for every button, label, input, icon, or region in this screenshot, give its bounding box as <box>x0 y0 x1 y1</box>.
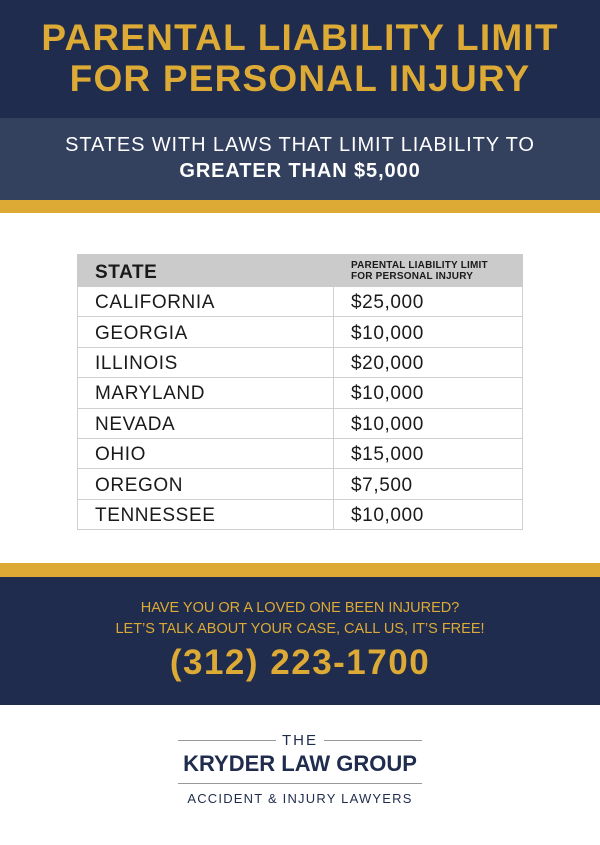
subheader: STATES WITH LAWS THAT LIMIT LIABILITY TO <box>65 134 535 156</box>
table: $20,000 <box>351 353 424 374</box>
call to action: LET’S TALK ABOUT YOUR CASE, CALL US, IT’S FREE! <box>115 621 485 637</box>
subheader: GREATER THAN $5,000 <box>179 160 421 182</box>
table: GEORGIA <box>95 323 188 344</box>
table: MARYLAND <box>95 383 205 404</box>
table: $10,000 <box>351 323 424 344</box>
logo <box>178 732 422 806</box>
table: OREGON <box>95 475 183 496</box>
header: title <box>0 0 600 118</box>
logo: KRYDER LAW GROUP <box>183 751 417 776</box>
table: FOR PERSONAL INJURY <box>351 270 473 282</box>
table: $10,000 <box>351 505 424 526</box>
phone number: (312) 223-1700 <box>170 643 430 682</box>
table <box>77 254 523 530</box>
table: $7,500 <box>351 475 413 496</box>
call to action <box>0 577 600 705</box>
call to action: HAVE YOU OR A LOVED ONE BEEN INJURED? <box>141 600 459 616</box>
header: title: FOR PERSONAL INJURY <box>70 58 530 99</box>
table: $15,000 <box>351 444 424 465</box>
table: $25,000 <box>351 292 424 313</box>
table: STATE <box>95 262 157 282</box>
table: CALIFORNIA <box>95 292 215 313</box>
subheader <box>0 118 600 200</box>
table: ILLINOIS <box>95 353 178 374</box>
header: title: PARENTAL LIABILITY LIMIT <box>41 17 559 58</box>
table: $10,000 <box>351 414 424 435</box>
table: NEVADA <box>95 414 175 435</box>
table: OHIO <box>95 444 146 465</box>
table: TENNESSEE <box>95 505 216 526</box>
table: PARENTAL LIABILITY LIMIT <box>351 260 488 270</box>
table: $10,000 <box>351 383 424 404</box>
logo: THE <box>282 732 318 749</box>
logo: ACCIDENT & INJURY LAWYERS <box>187 791 413 806</box>
